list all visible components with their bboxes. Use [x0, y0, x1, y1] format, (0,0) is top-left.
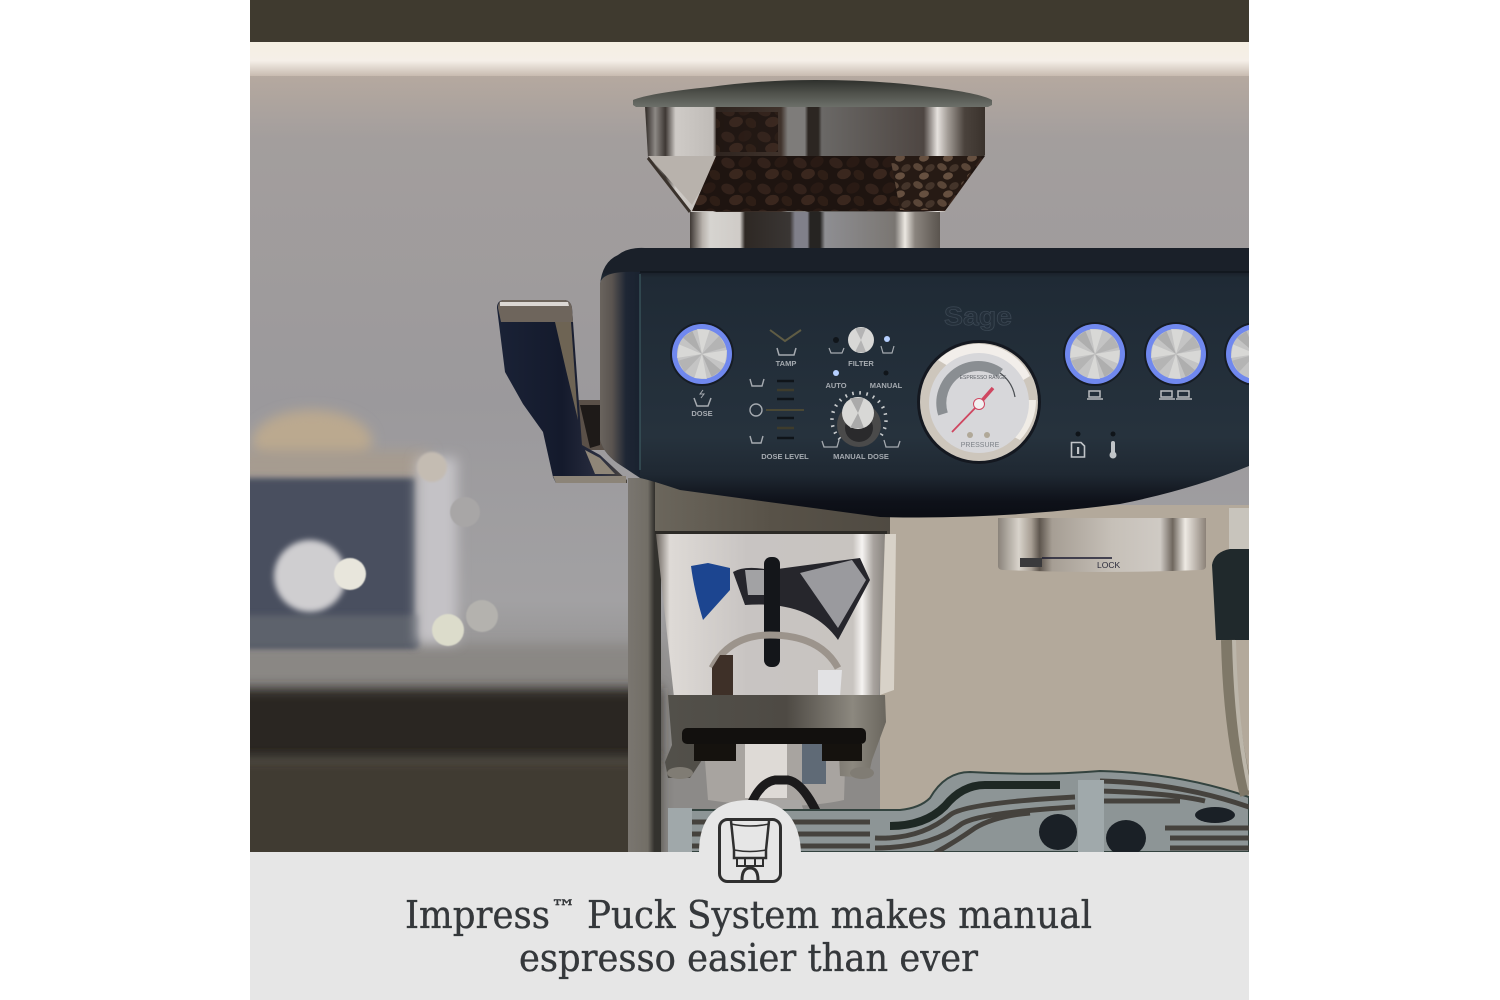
dose icon and label: DOSE	[691, 409, 713, 418]
pressure gauge: ESPRESSO RANGE	[960, 375, 1007, 381]
bean hopper	[633, 80, 992, 249]
hopper lid	[633, 80, 992, 107]
infographic canvas	[250, 0, 1249, 1000]
dose level scale	[750, 379, 809, 461]
manual dose dial	[822, 393, 900, 461]
steam wand	[1212, 508, 1250, 795]
reflection: arch	[712, 635, 838, 668]
hopper collar	[690, 210, 940, 249]
filter selector: FILTER	[848, 359, 874, 368]
icon tab	[699, 800, 801, 853]
portafilter basket	[705, 744, 845, 806]
single cup button	[1063, 322, 1127, 399]
third button	[1224, 322, 1288, 386]
lock label: LOCK	[1097, 560, 1120, 570]
caption panel	[250, 800, 1249, 1000]
brand logo: Sage	[944, 301, 1012, 331]
chrome funnel	[656, 534, 885, 697]
caption text: ™	[551, 895, 576, 919]
dose level scale: DOSE LEVEL	[761, 452, 809, 461]
dose icon and label	[691, 390, 713, 418]
portafilter handle	[778, 806, 803, 809]
caption text: espresso easier than ever	[519, 936, 979, 980]
drip tray	[668, 771, 1249, 856]
tray silhouette	[672, 771, 1249, 852]
control panel body	[600, 248, 1288, 517]
dosing funnel and cradle	[655, 482, 896, 809]
caption text: Puck System makes manual	[587, 893, 1092, 937]
group head	[998, 518, 1206, 572]
grey cradle	[665, 695, 886, 778]
reflection: blue patch	[691, 563, 730, 620]
tray drain holes	[1039, 814, 1077, 850]
reflection: tamper	[733, 558, 870, 640]
product photo	[200, 0, 1288, 868]
status icons	[1072, 432, 1116, 458]
kitchen background	[200, 0, 1260, 868]
blurred toaster in background	[240, 410, 498, 648]
auto manual labels: AUTO	[825, 381, 847, 390]
caption text: Impress	[405, 893, 550, 937]
portafilter handle bracket	[497, 300, 627, 483]
double cup button	[1144, 322, 1208, 399]
filter selector	[829, 327, 894, 368]
tamp indicator	[770, 330, 801, 368]
machine column	[628, 478, 661, 858]
side shoulder	[600, 272, 640, 477]
hopper lower left chrome	[648, 156, 720, 205]
gauge needle	[952, 404, 979, 432]
gauge labels: PRESSURE	[961, 442, 1000, 449]
pressure gauge	[917, 340, 1041, 464]
manual dose dial: MANUAL DOSE	[833, 452, 889, 461]
beans	[692, 156, 985, 211]
tray stripes	[890, 785, 1060, 826]
grey band under panel	[655, 480, 890, 534]
dose knob	[670, 322, 734, 386]
icon: portafilter in rounded square	[720, 820, 780, 882]
auto manual labels	[826, 370, 902, 388]
hopper glass and reflections	[645, 106, 985, 212]
tamper lever	[764, 557, 780, 667]
caption text	[405, 893, 1092, 980]
tamp indicator: TAMP	[776, 359, 796, 368]
auto manual labels: MANUAL	[870, 381, 903, 390]
